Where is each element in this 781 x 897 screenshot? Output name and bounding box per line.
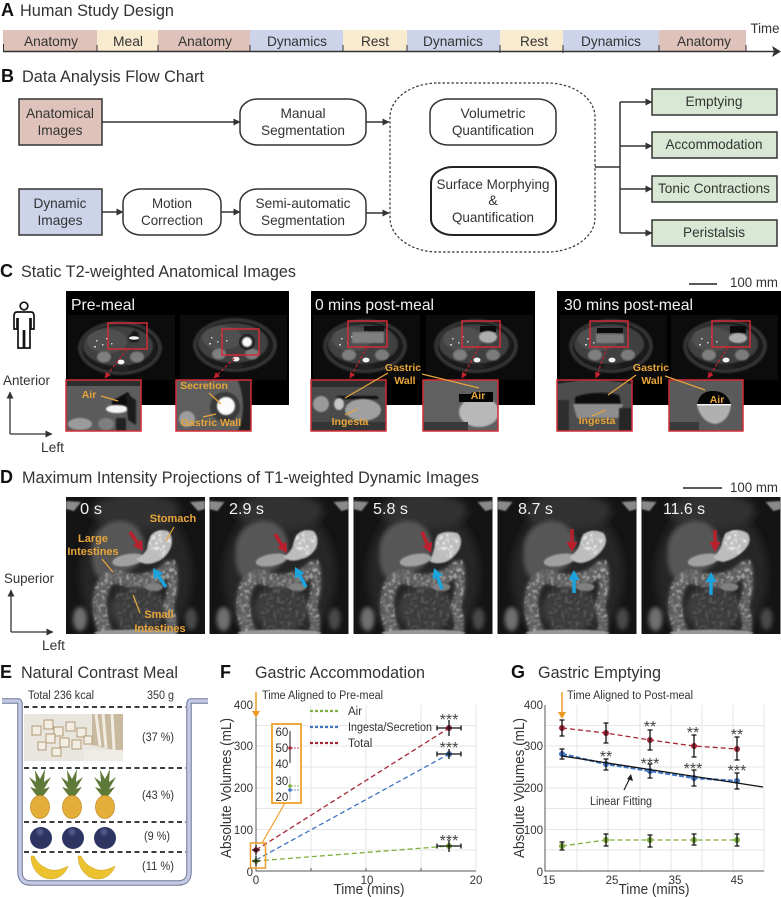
legend: Ingesta/Secretion — [348, 722, 432, 734]
arrow: time aligned — [558, 692, 566, 719]
label: total energy: Total 236 kcal — [28, 690, 94, 702]
food: blueberries — [30, 827, 116, 849]
arrow: blue — [568, 570, 580, 593]
layer dividers — [24, 707, 186, 852]
heading: Gastric Emptying: Gastric Emptying — [538, 663, 661, 682]
percentages: (43 %) — [142, 790, 174, 802]
y axis labels: 400 — [524, 700, 543, 712]
output: Tonic Contractions: Tonic Contractions — [658, 180, 770, 196]
percentages — [142, 732, 174, 873]
significance stars: ** — [600, 749, 612, 766]
percentages: (11 %) — [142, 861, 174, 873]
icon: person — [14, 302, 34, 348]
arrow: blue — [706, 572, 716, 595]
significance stars — [600, 719, 746, 780]
panel A: human study design — [1, 0, 781, 57]
zoom callout box — [250, 724, 301, 868]
frame: 2.9 s — [210, 493, 348, 647]
timeline segments: Dynamics — [581, 33, 641, 49]
box: Manual Segmentation: Manual — [280, 105, 326, 121]
grid and axes — [545, 705, 764, 871]
arrow: red — [275, 534, 287, 553]
label: 30 mins post-meal: 30 mins post-meal — [564, 297, 693, 314]
zoom callout box: 20 — [276, 792, 288, 804]
panel B: data analysis flow chart — [1, 66, 777, 252]
box: Dynamic Images — [19, 189, 102, 235]
box: Anatomical Images: Anatomical — [26, 105, 94, 121]
box: Manual Segmentation — [240, 99, 366, 145]
y axis title: Absolute Volumes (mL) — [219, 718, 235, 858]
food: bananas — [31, 856, 115, 879]
callout: Gastric Wall 0 mins: Wall — [394, 375, 416, 387]
food: tofu — [24, 714, 123, 761]
y axis labels: 300 — [234, 741, 253, 753]
inset: ingesta 30 mins — [557, 380, 632, 431]
panel D: maximum intensity projections — [0, 467, 780, 653]
significance stars: ** — [731, 727, 743, 744]
series: total — [559, 720, 740, 760]
inset: secretion and gastric wall — [176, 380, 251, 431]
heading: Gastric Accommodation: Gastric Accommodation — [255, 663, 425, 682]
output: Peristalsis: Peristalsis — [683, 224, 745, 240]
x axis labels: 45 — [731, 875, 743, 887]
series: ingesta or secretion — [256, 749, 461, 860]
callout: Gastric Wall 30 mins — [608, 362, 705, 395]
y axis labels: 300 — [524, 741, 543, 753]
box: Dynamic Images: Images — [38, 212, 82, 228]
box: Anatomical Images — [19, 99, 102, 145]
heading: Static T2-weighted Anatomical Images: Static T2-weighted Anatomical Images — [21, 262, 296, 281]
y axis labels — [524, 700, 543, 879]
arrow: time axis — [3, 46, 781, 57]
box: Volumetric Quantification: Quantification — [452, 122, 534, 138]
dotted group container — [390, 83, 595, 252]
output: Accommodation — [652, 132, 777, 158]
panel F: gastric accommodation chart — [219, 662, 482, 897]
significance stars — [440, 712, 458, 850]
x axis labels: 25 — [606, 875, 618, 887]
arrow: red — [566, 529, 578, 552]
y axis labels: 400 — [234, 700, 253, 712]
significance stars: *** — [641, 756, 659, 773]
frame: 5.8 s: 5.8 s — [373, 501, 408, 518]
label: Time Aligned to Post-meal: Time Aligned to Post-meal — [567, 690, 693, 702]
panel letter E: E — [0, 662, 12, 682]
timeline segments: Rest — [361, 33, 389, 49]
label: 0 mins post-meal: 0 mins post-meal — [315, 297, 434, 314]
significance stars: ** — [687, 725, 699, 742]
inset: air 30 mins: Air — [710, 394, 724, 406]
frame: 5.8 s — [354, 493, 492, 647]
y axis labels — [234, 700, 253, 879]
box: Surface Morphying and Quantification: Quantification — [452, 209, 534, 225]
box: Motion Correction: Correction — [141, 212, 203, 228]
inset: ingesta 0 mins: Ingesta — [332, 416, 369, 428]
box: Surface Morphying and Quantification — [431, 167, 556, 235]
arrow: blue — [295, 567, 306, 587]
beaker inner colour — [2, 701, 208, 883]
zoom callout box: 50 — [276, 743, 288, 755]
box: Surface Morphying and Quantification: & — [488, 192, 498, 208]
linear fit line — [562, 756, 763, 787]
significance stars: *** — [440, 740, 458, 757]
y axis labels: 0 — [247, 867, 253, 879]
box: Manual Segmentation: Segmentation — [261, 122, 345, 138]
y axis title: Absolute Volumes (mL) — [512, 718, 528, 858]
y axis labels: 100 — [524, 825, 543, 837]
inset: ingesta 0 mins — [311, 380, 386, 431]
heading: Natural Contrast Meal: Natural Contrast Meal — [21, 663, 178, 682]
arrow: linear fitting pointer — [624, 774, 633, 790]
label: Linear Fitting: Linear Fitting — [590, 796, 652, 808]
significance stars: *** — [684, 761, 702, 778]
frame: 8.7 s — [498, 493, 636, 647]
timeline segments: Anatomy — [178, 33, 232, 49]
frame: 0 s: Intestines — [67, 546, 119, 558]
legend — [310, 706, 432, 750]
timeline segments: Rest — [520, 33, 548, 49]
series: ingesta or secretion — [559, 749, 740, 789]
scale bar 100 mm — [689, 275, 778, 290]
orientation axes: superior and left: Left — [42, 638, 65, 653]
box: Semi-automatic Segmentation: Semi-automatic — [256, 195, 350, 211]
inset: air pre-meal: Air — [82, 389, 96, 401]
timeline segments — [3, 30, 746, 53]
x axis labels: 20 — [470, 875, 482, 887]
output: Peristalsis — [652, 220, 777, 246]
orientation axes: superior and left: Superior — [4, 571, 54, 586]
scale bar 100 mm: 100 mm — [730, 275, 778, 290]
series: air — [256, 840, 461, 861]
scale bar 100 mm: 100 mm — [730, 480, 778, 495]
box: Motion Correction: Motion — [152, 195, 192, 211]
scale bar 100 mm — [683, 480, 778, 495]
arrow: red — [422, 532, 432, 553]
flow arrows — [102, 102, 652, 233]
orientation axes: anterior and left — [3, 373, 64, 455]
panel letter D: D — [0, 467, 13, 487]
significance stars: ** — [644, 719, 656, 736]
image panel: 30 mins post-meal — [557, 291, 781, 405]
timeline segments: Dynamics — [267, 33, 327, 49]
zoom callout box: 60 — [276, 727, 288, 739]
frame: 8.7 s: 8.7 s — [518, 501, 553, 518]
series: air — [559, 834, 740, 850]
inset: ingesta 30 mins: Ingesta — [579, 415, 616, 427]
label: Pre-meal: Pre-meal — [71, 297, 135, 314]
timeline segments: Anatomy — [677, 33, 731, 49]
output: Emptying: Emptying — [686, 93, 742, 109]
heading: Maximum Intensity Projections: Maximum Intensity Projections of T1-weighted Dynamic Images — [22, 468, 479, 487]
zoom callout box: 40 — [276, 759, 288, 771]
panel letter F: F — [220, 662, 231, 682]
panel G: gastric emptying chart — [511, 662, 764, 897]
output: Accommodation: Accommodation — [666, 136, 762, 152]
panel letter G: G — [511, 662, 525, 682]
panel letter C: C — [0, 261, 13, 281]
inset: secretion and gastric wall: Gastric Wall — [181, 417, 241, 429]
beaker — [2, 701, 208, 883]
start points — [252, 845, 260, 866]
box: Anatomical Images: Images — [38, 122, 82, 138]
heading: Data Analysis Flow Chart: Data Analysis Flow Chart — [22, 67, 204, 86]
arrow: red — [130, 532, 143, 551]
label: total weight: 350 g — [147, 690, 174, 702]
box: Semi-automatic Segmentation — [240, 189, 366, 235]
frame: 0 s: Small — [144, 609, 174, 621]
frame: 11.6 s — [642, 493, 780, 647]
x axis labels: 0 — [253, 875, 259, 887]
callout: Gastric Wall 30 mins: Gastric — [633, 362, 669, 374]
label: Time Aligned to Pre-meal: Time Aligned to Pre-meal — [262, 690, 383, 702]
orientation axes: anterior and left: Anterior — [3, 373, 50, 388]
box: Surface Morphying and Quantification: Surface Morphying — [436, 176, 550, 192]
frame: 0 s: 0 s — [80, 501, 102, 518]
box: Semi-automatic Segmentation: Segmentation — [261, 212, 345, 228]
inset: air 0 mins: Air — [471, 390, 485, 402]
panel C: static T2-weighted anatomical images — [0, 261, 781, 455]
output: Emptying — [652, 89, 777, 115]
frame: 0 s: Large — [78, 533, 108, 545]
box: Motion Correction — [123, 189, 221, 235]
panel letter B: B — [1, 66, 14, 86]
grid and axes — [256, 705, 476, 871]
panel letter A: A — [1, 0, 14, 20]
y axis labels: 200 — [524, 783, 543, 795]
legend: Air — [348, 706, 362, 718]
arrow: time aligned — [252, 692, 260, 718]
series: total — [256, 720, 461, 850]
timeline segments: Dynamics — [423, 33, 483, 49]
x axis labels — [253, 875, 482, 887]
frame: 0 s — [66, 493, 205, 647]
callout: Gastric Wall 0 mins: Gastric — [385, 362, 421, 374]
box: Volumetric Quantification: Volumetric — [460, 105, 526, 121]
x axis labels: 35 — [669, 875, 681, 887]
arrow: red — [710, 530, 720, 552]
y axis labels: 0 — [537, 867, 543, 879]
inset: secretion and gastric wall: Secretion — [180, 380, 228, 392]
callout: Gastric Wall 30 mins: Wall — [641, 375, 663, 387]
frame: 0 s: Stomach — [150, 513, 197, 525]
inset: air 0 mins — [423, 380, 499, 431]
inset: air pre-meal — [66, 380, 141, 431]
x axis labels: 15 — [543, 875, 555, 887]
heading: Human Study Design: Human Study Design — [20, 1, 174, 20]
significance stars: *** — [440, 712, 458, 729]
inset: air 30 mins — [669, 380, 743, 431]
frame: 0 s: Intestines — [134, 623, 186, 635]
y axis labels: 200 — [234, 783, 253, 795]
timeline segments: Anatomy — [24, 33, 78, 49]
panel E: natural contrast meal — [0, 662, 208, 883]
box: Dynamic Images: Dynamic — [34, 195, 86, 211]
arrow: blue — [153, 568, 166, 587]
y axis labels: 100 — [234, 825, 253, 837]
food: pineapples — [29, 769, 116, 818]
callout: Gastric Wall 0 mins — [345, 362, 479, 398]
image panel: pre-meal — [66, 291, 289, 405]
output: Tonic Contractions — [652, 176, 777, 202]
x axis labels — [543, 875, 743, 887]
label: Time: Time — [750, 20, 780, 36]
x axis labels: 10 — [361, 875, 373, 887]
orientation axes: superior and left — [4, 571, 65, 653]
arrow: blue — [432, 568, 443, 589]
orientation axes: anterior and left: Left — [41, 440, 64, 455]
percentages: (9 %) — [144, 831, 170, 843]
timeline segments: Meal — [113, 33, 143, 49]
zoom callout box: 30 — [276, 776, 288, 788]
frame: 2.9 s: 2.9 s — [229, 501, 264, 518]
box: Volumetric Quantification — [430, 99, 556, 145]
frame: 11.6 s: 11.6 s — [663, 501, 705, 518]
significance stars: *** — [440, 833, 458, 850]
legend: Total — [348, 738, 372, 750]
percentages: (37 %) — [142, 732, 174, 744]
significance stars: *** — [728, 763, 746, 780]
image panel: 0 mins post-meal — [311, 291, 535, 405]
